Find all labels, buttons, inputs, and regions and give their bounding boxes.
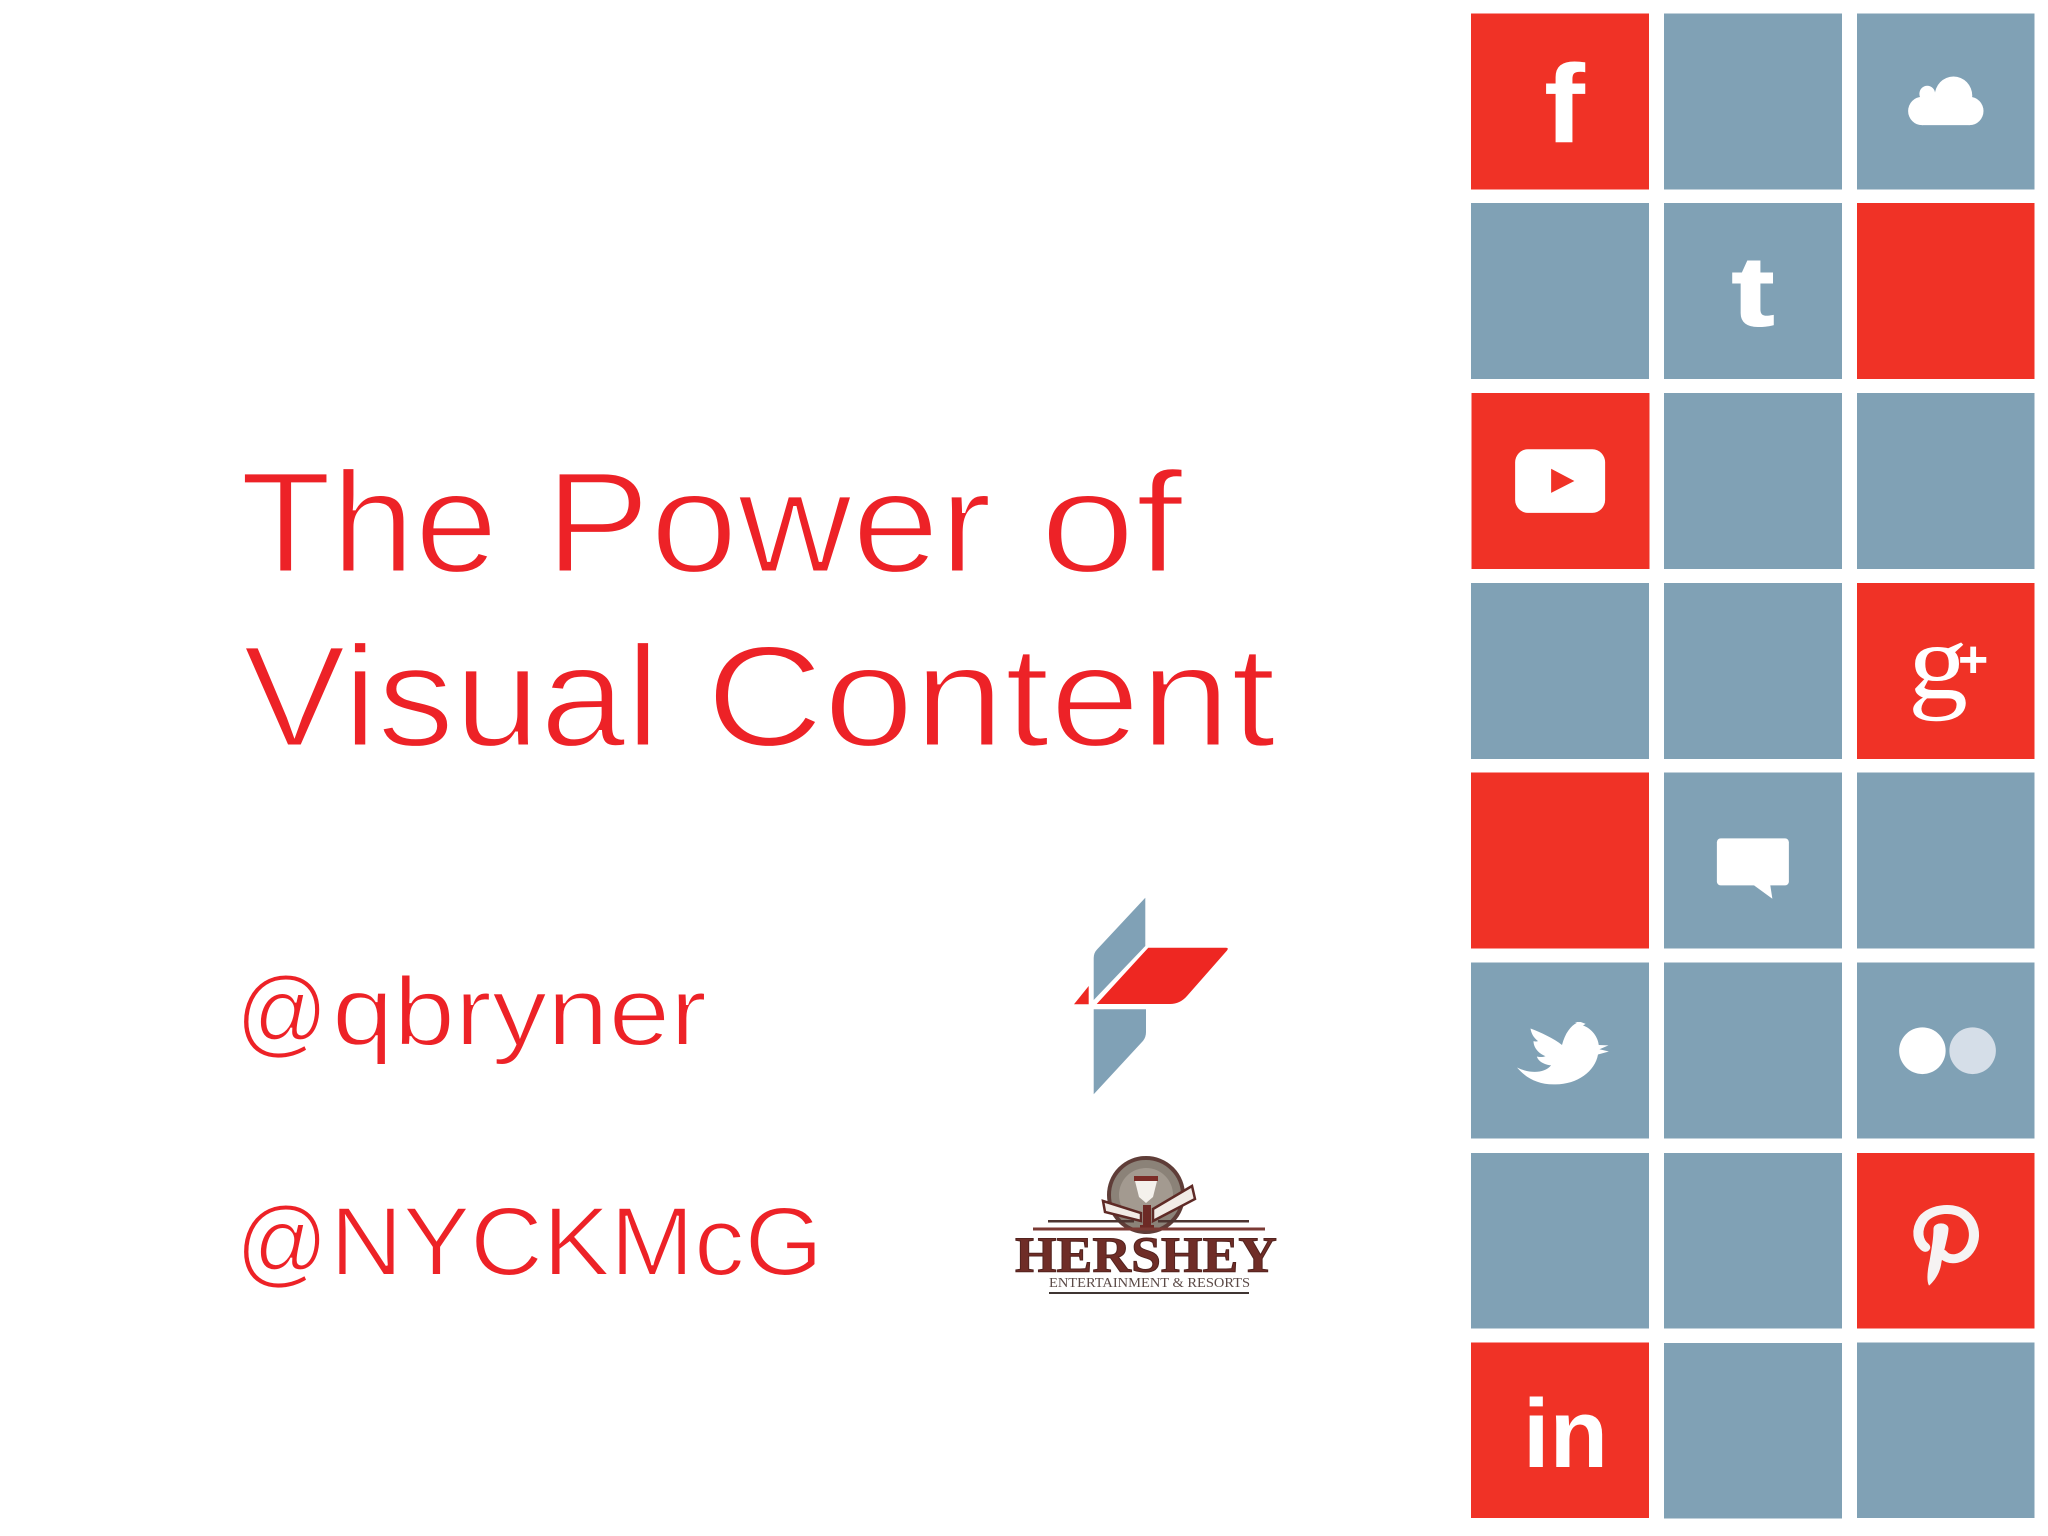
tile: linkedin <box>1471 1342 1649 1518</box>
tile: google plus: g <box>1908 603 1968 722</box>
tile: cloud <box>1857 14 2034 190</box>
tile: tumblr <box>1664 203 1842 379</box>
tile: youtube <box>1472 393 1650 569</box>
tagline: ENTERTAINMENT & RESORTS <box>1049 1276 1250 1291</box>
title: of <box>1040 442 1184 603</box>
tile: blank blue <box>1471 203 1649 379</box>
tile: blank red <box>1471 772 1649 948</box>
tile: blank blue <box>1857 772 2034 948</box>
tile: blank blue <box>1664 1343 1842 1518</box>
title <box>240 442 1276 777</box>
tile: blank blue <box>1664 1153 1842 1328</box>
title: Visual <box>243 616 660 777</box>
logo: Hershey <box>1015 1158 1277 1294</box>
tile: blank blue <box>1664 962 1842 1138</box>
wordmark: HERSHEY <box>1015 1228 1277 1284</box>
tile: blank blue <box>1664 393 1842 569</box>
title: The <box>240 442 498 603</box>
emblem <box>1103 1158 1195 1232</box>
tile: facebook: f <box>1544 42 1586 166</box>
tile: facebook <box>1471 14 1649 190</box>
handle: qbryner <box>236 957 707 1066</box>
tile: flickr <box>1857 962 2034 1138</box>
logo: F mark <box>1074 898 1228 1094</box>
tile: blank blue <box>1857 1342 2034 1518</box>
tile: blank blue <box>1857 393 2034 569</box>
social tile grid <box>1471 14 2034 1518</box>
title: Content <box>706 616 1276 777</box>
tile: blank blue <box>1471 583 1649 759</box>
tile: twitter <box>1471 962 1649 1138</box>
handle: NYCKMcG: @ <box>236 1187 328 1296</box>
tile: blank blue <box>1664 14 1842 190</box>
handle: NYCKMcG: NYCKMcG <box>330 1187 823 1296</box>
tile: comment <box>1664 772 1842 948</box>
tile: linkedin: in <box>1523 1379 1608 1488</box>
tile: blank blue <box>1664 583 1842 759</box>
tile: tumblr: t <box>1732 237 1774 346</box>
tile: blank blue <box>1471 1153 1649 1328</box>
tile: blank red <box>1857 203 2034 379</box>
tile: pinterest <box>1857 1153 2034 1328</box>
tile: google plus <box>1857 583 2034 759</box>
handle: qbryner: qbryner <box>332 957 707 1066</box>
handle: qbryner: @ <box>236 957 328 1066</box>
title: Power <box>545 442 992 603</box>
tile: google plus: + <box>1958 631 1988 689</box>
